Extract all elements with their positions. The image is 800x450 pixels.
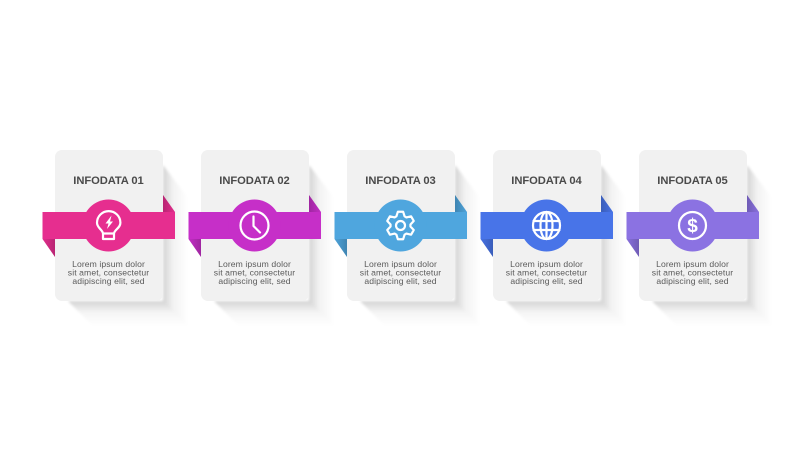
body text bbox=[68, 259, 149, 286]
ribbon bbox=[188, 195, 321, 257]
icon: dollar coin: $ bbox=[687, 216, 698, 237]
body text bbox=[360, 259, 441, 286]
card shadow bbox=[506, 165, 626, 326]
body text bbox=[506, 259, 587, 286]
heading: INFODATA 02 bbox=[219, 175, 290, 187]
panel: infodata 05 bbox=[626, 150, 772, 326]
card bbox=[639, 150, 747, 301]
panel: infodata 03 bbox=[334, 150, 480, 326]
card shadow bbox=[652, 165, 772, 326]
panel: infodata 02 bbox=[188, 150, 334, 326]
body text: sit amet, consectetur bbox=[214, 268, 295, 278]
card shadow bbox=[360, 165, 480, 326]
body text bbox=[652, 259, 733, 286]
ribbon bbox=[626, 195, 759, 257]
icon: gear bbox=[387, 212, 414, 239]
body text: adipiscing elit, sed bbox=[510, 276, 583, 286]
body text: sit amet, consectetur bbox=[68, 268, 149, 278]
ribbon bbox=[42, 195, 175, 257]
icon: light bulb bbox=[97, 211, 120, 239]
panel: infodata 01 bbox=[42, 150, 188, 326]
body text: Lorem ipsum dolor bbox=[656, 259, 729, 269]
body text: Lorem ipsum dolor bbox=[510, 259, 583, 269]
card bbox=[347, 150, 455, 301]
card shadow bbox=[214, 165, 334, 326]
card bbox=[201, 150, 309, 301]
card shadow bbox=[68, 165, 188, 326]
icon: dollar coin bbox=[679, 212, 706, 239]
heading: INFODATA 03 bbox=[365, 175, 436, 187]
ribbon bbox=[334, 195, 467, 257]
body text: Lorem ipsum dolor bbox=[72, 259, 145, 269]
body text: adipiscing elit, sed bbox=[72, 276, 145, 286]
icon: clock bbox=[240, 212, 268, 240]
panel: infodata 04 bbox=[480, 150, 626, 326]
heading: INFODATA 05 bbox=[657, 175, 728, 187]
body text: adipiscing elit, sed bbox=[218, 276, 291, 286]
body text: adipiscing elit, sed bbox=[364, 276, 437, 286]
body text bbox=[214, 259, 295, 286]
body text: Lorem ipsum dolor bbox=[218, 259, 291, 269]
card bbox=[493, 150, 601, 301]
card bbox=[55, 150, 163, 301]
heading: INFODATA 04 bbox=[511, 175, 583, 187]
body text: Lorem ipsum dolor bbox=[364, 259, 437, 269]
icon: globe bbox=[533, 212, 560, 239]
body text: sit amet, consectetur bbox=[506, 268, 587, 278]
body text: sit amet, consectetur bbox=[360, 268, 441, 278]
body text: adipiscing elit, sed bbox=[656, 276, 729, 286]
body text: sit amet, consectetur bbox=[652, 268, 733, 278]
heading: INFODATA 01 bbox=[73, 175, 144, 187]
ribbon bbox=[480, 195, 613, 257]
